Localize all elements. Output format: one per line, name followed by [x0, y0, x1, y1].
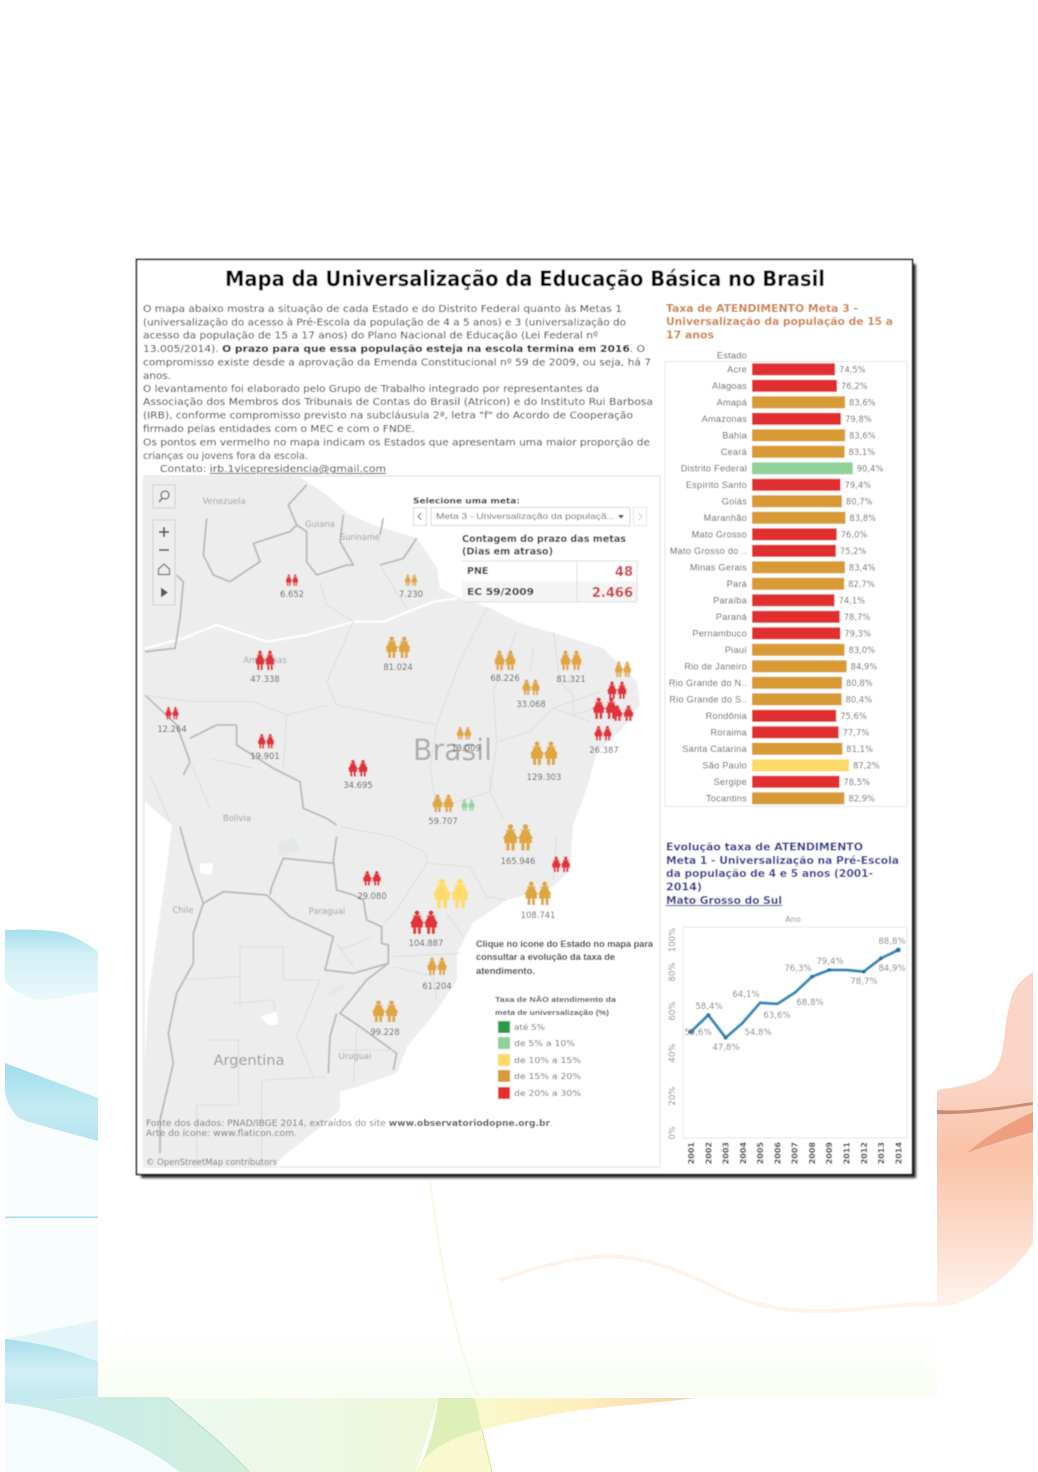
bar chart: attendance by state: Roraima [711, 727, 748, 737]
instruction text: Clique no ícone do Estado no mapa para [476, 939, 653, 949]
bar chart: attendance by state: Pará [727, 579, 748, 589]
data labels: 47,8% [712, 1043, 740, 1053]
heading: bar chart title: Universalização da população de 15 a [666, 316, 893, 328]
bar chart: attendance by state: 80,8% [846, 678, 873, 688]
instruction text: consultar a evolução da taxa de [476, 952, 615, 962]
x axis years: 2004 [739, 1142, 748, 1164]
bar chart: attendance by state: 79,4% [844, 480, 871, 490]
bar chart: attendance by state: 78,7% [844, 612, 870, 622]
bar chart: attendance by state: 84,9% [851, 661, 877, 671]
bar chart: attendance by state: Paraíba [713, 595, 748, 605]
icons and state counts: 33.068 [516, 699, 546, 709]
icons and state counts: 99.228 [370, 1027, 400, 1037]
heading: line chart title: Meta 1 - Universalização na Pré-Escola [666, 855, 899, 867]
x axis years: 2003 [722, 1142, 731, 1164]
dropdown: goal selector [413, 496, 646, 526]
x axis years: 2001 [687, 1142, 696, 1164]
bar chart: attendance by state: 78,5% [843, 777, 870, 787]
panel: dashboard [136, 260, 912, 1174]
y axis labels [668, 928, 678, 1140]
bar chart: attendance by state: Paraná [716, 612, 748, 622]
heading: line chart title [666, 842, 899, 907]
text block: introduction: 13.005/2014). O prazo para que essa população esteja na escola termina em 2016 . O [143, 344, 645, 355]
bar chart: attendance by state: Mato Grosso do .. [670, 546, 747, 556]
legend [495, 995, 617, 1099]
text block: introduction: crianças ou jovens fora da escola. [143, 451, 308, 462]
heading: line chart title: da população de 4 e 5 anos (2001- [666, 868, 873, 880]
instruction text [476, 939, 653, 976]
line chart: attendance evolution [668, 915, 907, 1164]
dropdown: goal selector: Meta 3 - Universalização da populaçã... [436, 511, 615, 521]
legend: até 5% [514, 1022, 545, 1032]
data labels: 58,4% [695, 1002, 723, 1012]
icons and state counts: 129.303 [527, 772, 561, 782]
source notes: © OpenStreetMap contributors [146, 1158, 278, 1168]
map land [145, 477, 640, 1166]
bar chart: attendance by state [665, 350, 907, 806]
x axis years: 2013 [877, 1142, 886, 1164]
data labels: 78,7% [850, 977, 878, 987]
y axis labels: 100% [668, 928, 678, 952]
legend: de 10% a 15% [514, 1055, 581, 1065]
icons and state counts: 68.226 [490, 673, 520, 683]
y axis labels: 80% [668, 963, 678, 981]
bar chart: attendance by state: 80,7% [846, 496, 873, 506]
data labels: 76,3% [784, 964, 812, 974]
text block: introduction: (universalização do acesso à Pré-Escola da população de 4 a 5 anos) e 3 (universalização do [143, 318, 626, 328]
legend: Taxa de NÃO atendimento da [495, 995, 617, 1004]
source notes: Arte do ícone: www.flaticon.com. [146, 1129, 297, 1139]
data labels: 88,8% [878, 937, 906, 947]
data labels [684, 937, 906, 1053]
heading: bar chart title [666, 303, 893, 342]
map place names: Chile [173, 905, 193, 915]
bar chart: attendance by state: 90,4% [857, 463, 883, 473]
bar chart: attendance by state: 77,7% [843, 727, 869, 737]
table: days overdue: EC 59/2009 [467, 587, 534, 598]
bar chart: attendance by state: São Paulo [702, 760, 747, 770]
icons and state counts: 81.321 [556, 674, 586, 684]
heading: bar chart title: 17 anos [666, 330, 714, 342]
data labels: 63,6% [763, 1011, 791, 1021]
icons and state counts: 7.230 [399, 589, 423, 599]
table: days overdue: 48 [615, 565, 633, 580]
source notes [146, 1119, 553, 1168]
icon: map search button [153, 485, 175, 508]
x axis years: 2008 [808, 1142, 817, 1164]
icons and state counts: 34.695 [343, 780, 373, 790]
heading: deadline count: (Dias em atraso) [462, 546, 553, 558]
background: colored waves [5, 930, 1033, 1472]
heading: line chart title: 2014) [666, 882, 702, 894]
bar chart: attendance by state: 75,6% [840, 711, 867, 721]
bar chart: attendance by state: Distrito Federal [681, 463, 747, 473]
dropdown: goal selector: Selecione uma meta: [413, 496, 520, 506]
text block: introduction: Contato: irb.1vicepresidencia@gmail.com [160, 464, 386, 475]
map place names: Suriname [340, 532, 380, 542]
map place names: Argentina [214, 1053, 284, 1069]
map place names: Amazonas [243, 655, 287, 665]
bar chart: attendance by state: Mato Grosso [692, 529, 747, 539]
bar chart: attendance by state: Rondônia [706, 711, 748, 721]
x axis years: 2005 [756, 1142, 765, 1164]
bar chart: attendance by state: Goiás [722, 496, 747, 506]
map borders north [145, 485, 607, 825]
bar chart: attendance by state: Espírito Santo [686, 480, 747, 490]
icon: map zoom controls [153, 520, 175, 605]
map borders south [160, 827, 557, 1167]
bar chart: attendance by state: 81,1% [846, 744, 873, 754]
bar chart: attendance by state: Pernambuco [692, 628, 747, 638]
table: days overdue: PNE [467, 566, 488, 577]
heading: line chart title: Evolução taxa de ATENDIMENTO [666, 842, 863, 854]
legend: de 20% a 30% [514, 1088, 581, 1098]
icons and state counts: 26.387 [589, 745, 619, 755]
x axis years: 2007 [791, 1142, 800, 1164]
heading: deadline count [462, 534, 626, 558]
data labels: 54,8% [744, 1028, 772, 1038]
bar chart: attendance by state: Santa Catarina [682, 744, 748, 754]
bar chart: attendance by state: Estado [717, 350, 747, 360]
data labels: 84,9% [878, 964, 906, 974]
bar chart: attendance by state: Ceará [721, 447, 748, 457]
icons and state counts: 47.338 [250, 674, 280, 684]
text block: introduction: acesso da população de 15 a 17 anos) do Plano Nacional de Educação (Lei Federal nº [143, 330, 599, 342]
bar chart: attendance by state: 83,0% [848, 645, 875, 655]
bar chart: attendance by state: Rio de Janeiro [684, 661, 747, 671]
bar chart: attendance by state: Bahia [722, 430, 748, 440]
map place names: Bolivia [223, 813, 251, 823]
map place names: Guiana [305, 519, 335, 529]
y axis labels: 0% [668, 1126, 678, 1140]
x axis years: 2006 [773, 1142, 782, 1164]
icons and state counts: 165.946 [501, 856, 535, 866]
bar chart: attendance by state: 83,8% [849, 513, 876, 523]
bar chart: attendance by state: Sergipe [714, 777, 747, 787]
map place names: Paraguai [309, 906, 345, 916]
y axis labels: 60% [668, 1002, 678, 1020]
bar chart: attendance by state: Acre [727, 364, 747, 374]
data labels: 79,4% [816, 957, 844, 967]
bar chart: attendance by state: 74,1% [838, 595, 865, 605]
bar chart: attendance by state: Minas Gerais [690, 562, 747, 572]
bar chart: attendance by state: 87,2% [853, 760, 880, 770]
x axis years: 2014 [894, 1142, 903, 1164]
text block: introduction: (IRB), conforme compromisso previsto na subcláusula 2ª, letra "f" do Acordo de Cooperação [143, 410, 633, 422]
icons and state counts [157, 574, 634, 1037]
text block: introduction: Associação dos Membros dos Tribunais de Contas do Brasil (Atricon) e do Instituto Rui Barbosa [143, 397, 653, 408]
bar chart: attendance by state: Alagoas [712, 381, 747, 391]
line chart: attendance evolution: Ano [785, 915, 801, 924]
icons and state counts: 12.264 [157, 724, 187, 734]
data line [688, 948, 901, 1040]
text block: introduction: O mapa abaixo mostra a situação de cada Estado e do Distrito Federal quanto às Metas 1 [143, 304, 622, 315]
icons and state counts: 59.707 [428, 816, 458, 826]
y axis labels: 20% [668, 1087, 678, 1105]
x axis years: 2011 [842, 1142, 852, 1164]
bar chart: attendance by state: 83,6% [849, 397, 876, 407]
source notes: Fonte dos dados: PNAD/IBGE 2014, extraídos do site www.observatoriodopne.org.br . [146, 1119, 553, 1129]
icons and state counts: 108.741 [521, 910, 555, 920]
table: days overdue [462, 561, 637, 602]
text block: introduction: Os pontos em vermelho no mapa indicam os Estados que apresentam uma maior proporção de [143, 438, 650, 448]
map place names: Uruguai [339, 1051, 371, 1061]
icons and state counts: 104.887 [409, 938, 443, 948]
map place names: Brasil [413, 733, 492, 767]
table: days overdue: 2.466 [592, 586, 633, 601]
bar chart: attendance by state: Maranhão [704, 513, 747, 523]
bar chart: attendance by state: Amazonas [702, 414, 747, 424]
x axis years: 2002 [704, 1142, 713, 1164]
icons and state counts: 6.652 [280, 589, 304, 599]
legend: meta de universalização (%) [495, 1008, 610, 1017]
bar chart: attendance by state: 75,2% [840, 546, 866, 556]
map place names [173, 496, 492, 1069]
bar chart: attendance by state: 80,4% [846, 694, 872, 704]
text block: introduction: O levantamento foi elaborado pelo Grupo de Trabalho integrado por representantes da [143, 384, 599, 395]
heading: bar chart title: Taxa de ATENDIMENTO Meta 3 - [666, 303, 858, 315]
data labels: 64,1% [732, 990, 760, 1000]
map place names: Venezuela [202, 496, 246, 506]
bar chart: attendance by state: 76,2% [841, 381, 868, 391]
bar chart: attendance by state: Amapá [717, 397, 748, 407]
data labels: 50,6% [684, 1028, 712, 1038]
bar chart: attendance by state: 79,8% [845, 414, 872, 424]
icons and state counts: 29.080 [357, 891, 387, 901]
bar chart: attendance by state: Piauí [725, 645, 747, 655]
y axis labels: 40% [668, 1044, 678, 1062]
legend: de 5% a 10% [514, 1038, 575, 1048]
heading: deadline count: Contagem do prazo das metas [462, 534, 626, 545]
bar chart: attendance by state: 83,6% [849, 430, 876, 440]
data labels: 68,8% [796, 998, 824, 1008]
bar chart: attendance by state: 76,0% [841, 529, 867, 539]
bar chart: attendance by state: 83,1% [849, 447, 875, 457]
icons and state counts: 19.901 [250, 751, 280, 761]
text block: introduction: compromisso existe desde a aprovação da Emenda Constitucional nº 59 de 2009, ou seja, há 7 [143, 358, 651, 368]
bar chart: attendance by state: Rio Grande do N.. [669, 678, 747, 688]
x axis years [687, 1142, 903, 1164]
bar chart: attendance by state: Rio Grande do S.. [669, 694, 747, 704]
bar chart: attendance by state: 83,4% [849, 562, 876, 572]
x axis years: 2012 [860, 1142, 869, 1164]
panel shadow [141, 264, 916, 1178]
icons and state counts: 13.009 [451, 743, 481, 753]
heading: line chart title: Mato Grosso do Sul [666, 895, 782, 907]
bar chart: attendance by state: 82,7% [848, 579, 875, 589]
bar chart: attendance by state: 79,3% [844, 628, 871, 638]
bar chart: attendance by state: 82,9% [848, 793, 875, 803]
text block: introduction: firmado pelas entidades com o MEC e com o FNDE. [143, 424, 415, 435]
panel: map [144, 476, 660, 1168]
icons and state counts: 61.204 [422, 981, 452, 991]
text block: introduction [143, 304, 653, 475]
legend: de 15% a 20% [514, 1071, 581, 1081]
x axis years: 2009 [825, 1142, 834, 1164]
title: Mapa da Universalização da Educação Básica no Brasil [225, 267, 825, 291]
bar chart: attendance by state: Tocantins [706, 793, 747, 803]
icons and state counts: 81.024 [383, 662, 413, 672]
instruction text: atendimento. [476, 966, 535, 976]
bar chart: attendance by state: 74,5% [839, 364, 866, 374]
text block: introduction: anos. [143, 371, 171, 382]
